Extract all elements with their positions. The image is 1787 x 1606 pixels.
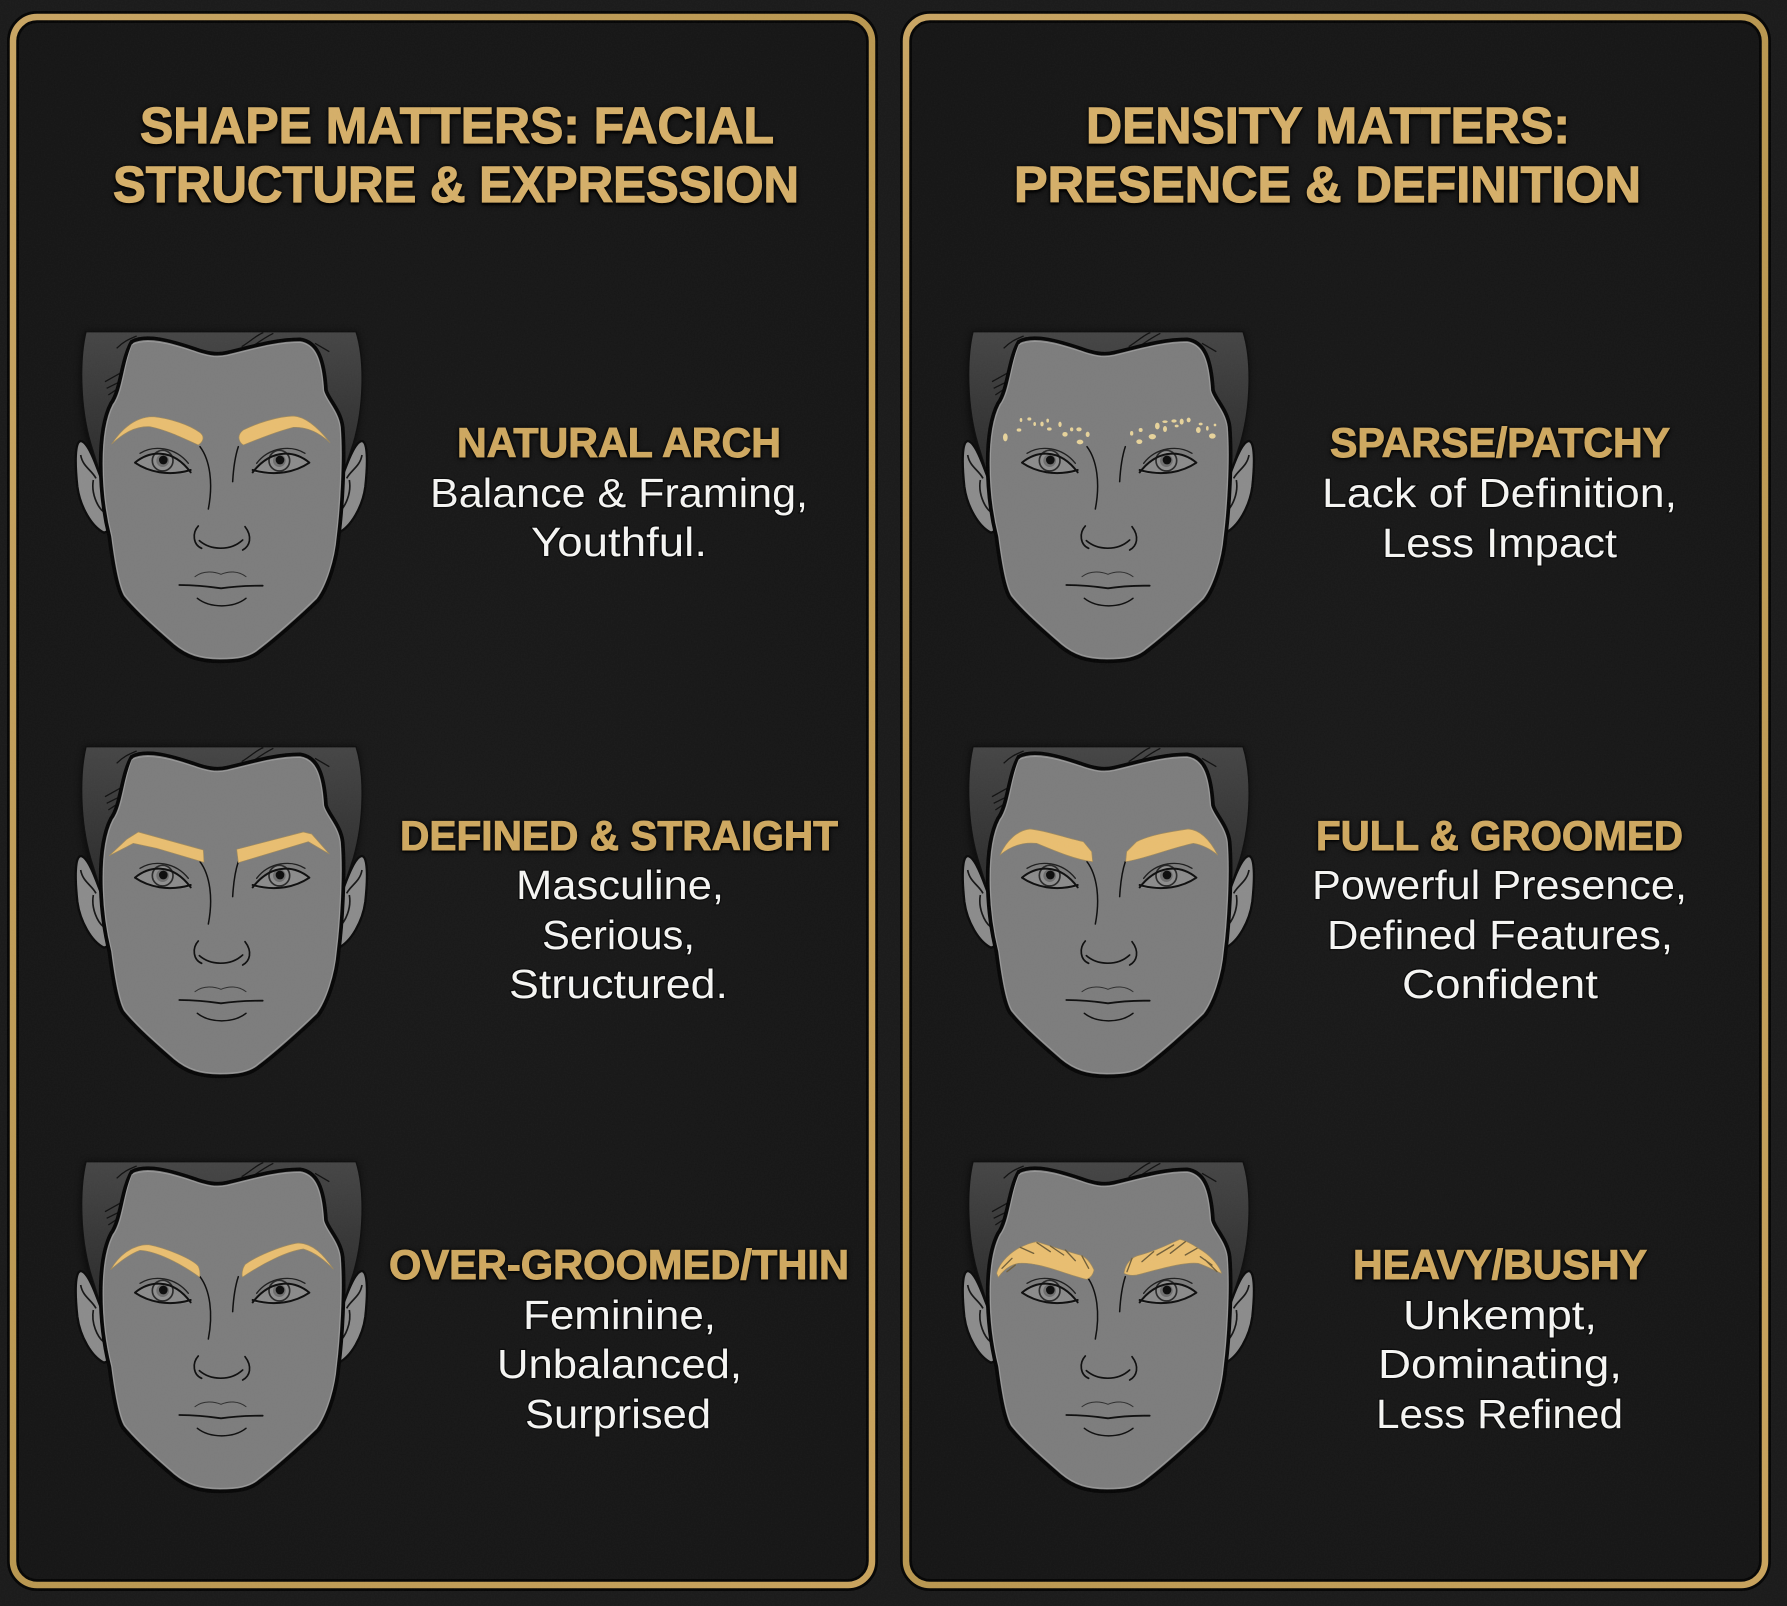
panel: density matters	[906, 17, 1765, 1585]
face: sparse and patchy	[963, 332, 1254, 662]
label: defined and straight: Structured.	[509, 961, 728, 1007]
label: sparse and patchy: Less Impact	[1382, 520, 1618, 566]
face: full and groomed	[963, 747, 1254, 1077]
label: heavy and bushy: Dominating,	[1378, 1341, 1622, 1387]
label: natural arch	[430, 419, 808, 565]
label: defined and straight: Masculine,	[516, 862, 724, 908]
label: defined and straight: DEFINED & STRAIGHT	[400, 812, 838, 859]
label: full and groomed	[1312, 812, 1687, 1007]
heading: density matters: DENSITY MATTERS:	[1086, 97, 1570, 154]
panel: shape matters	[13, 17, 872, 1585]
face: defined and straight	[76, 747, 367, 1077]
label: over-groomed and thin: Surprised	[525, 1391, 711, 1437]
label: defined and straight: Serious,	[542, 912, 695, 958]
heading: shape matters: STRUCTURE & EXPRESSION	[113, 156, 799, 213]
label: full and groomed: FULL & GROOMED	[1316, 812, 1683, 859]
label: full and groomed: Powerful Presence,	[1312, 862, 1687, 908]
label: over-groomed and thin: Unbalanced,	[497, 1341, 742, 1387]
face: heavy and bushy	[963, 1162, 1254, 1492]
label: natural arch: NATURAL ARCH	[457, 419, 781, 466]
label: sparse and patchy	[1322, 419, 1677, 566]
label: full and groomed: Confident	[1402, 961, 1599, 1007]
label: natural arch: Youthful.	[531, 519, 707, 565]
face: over-groomed and thin	[76, 1162, 367, 1492]
label: heavy and bushy: Unkempt,	[1403, 1292, 1597, 1338]
label: defined and straight	[400, 812, 838, 1007]
label: sparse and patchy: SPARSE/PATCHY	[1330, 419, 1670, 466]
label: over-groomed and thin: Feminine,	[523, 1292, 716, 1338]
label: heavy and bushy	[1353, 1241, 1647, 1437]
label: natural arch: Balance & Framing,	[430, 470, 808, 516]
label: heavy and bushy: Less Refined	[1376, 1391, 1623, 1437]
label: over-groomed and thin: OVER-GROOMED/THIN	[389, 1241, 849, 1288]
heading: density matters	[1014, 97, 1641, 213]
label: over-groomed and thin	[389, 1241, 849, 1437]
heading: shape matters	[113, 97, 799, 213]
label: full and groomed: Defined Features,	[1327, 912, 1673, 958]
label: sparse and patchy: Lack of Definition,	[1322, 470, 1677, 516]
heading: density matters: PRESENCE & DEFINITION	[1014, 156, 1641, 213]
face: natural arch	[76, 332, 367, 662]
label: heavy and bushy: HEAVY/BUSHY	[1353, 1241, 1647, 1288]
heading: shape matters: SHAPE MATTERS: FACIAL	[140, 97, 774, 154]
